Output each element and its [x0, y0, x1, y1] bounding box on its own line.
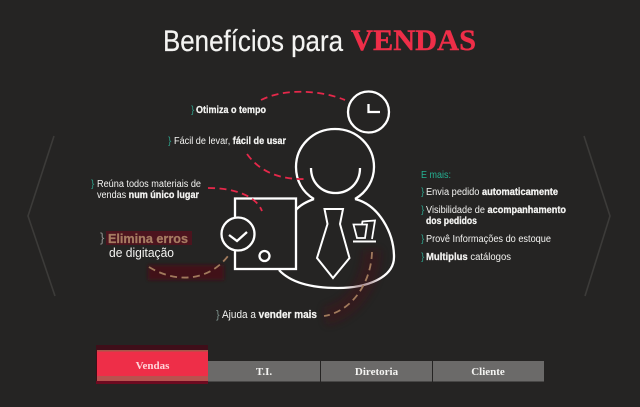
- title: VENDAS: [351, 24, 476, 57]
- tab: Diretoria: [321, 361, 432, 382]
- item: multiple catalogues: }: [421, 252, 425, 263]
- label: easy to carry: }: [168, 136, 172, 147]
- tab: T.I.: [208, 361, 320, 382]
- icon: clock: [348, 92, 389, 132]
- dashed connector: easy to use: [247, 154, 307, 179]
- label: all materials: vendas num único lugar: [97, 190, 199, 201]
- tab: Vendas (active): [96, 345, 208, 384]
- panel: more benefits: [421, 169, 566, 263]
- heading: and more: E mais:: [421, 169, 451, 181]
- item: order tracking: Visibilidade de acompanhamento: [426, 205, 566, 216]
- item: stock information: Provê Informações do estoque: [426, 234, 551, 245]
- arrow: previous: [28, 136, 55, 296]
- dashed connector: single place: [208, 188, 262, 211]
- item: automatic orders: Envia pedido automaticamente: [426, 187, 558, 198]
- tab: Diretoria: Diretoria: [355, 366, 399, 378]
- callout: eliminate errors: de digitação: [109, 245, 174, 260]
- title: [163, 24, 476, 58]
- icon: check circle: [222, 218, 254, 250]
- item: order tracking: }: [421, 205, 425, 216]
- tab: Cliente: [433, 361, 544, 382]
- navigation tabs: [96, 345, 544, 384]
- glow: error highlight: [148, 265, 224, 280]
- dashed connector: sell more: [324, 252, 372, 316]
- tab: Cliente: Cliente: [471, 366, 505, 378]
- item: order tracking: dos pedidos: [426, 216, 477, 227]
- item: stock information: }: [421, 234, 425, 245]
- body: [279, 199, 394, 288]
- label: easy to carry: Fácil de levar, fácil de usar: [174, 136, 286, 147]
- callout: eliminate errors: [100, 230, 192, 260]
- item: automatic orders: }: [421, 187, 425, 198]
- item: order tracking: [421, 205, 566, 227]
- label: save time: }: [191, 105, 195, 116]
- label: all materials: }: [91, 179, 95, 190]
- callout: eliminate errors: Elimina erros: [108, 231, 188, 246]
- label: all materials: [91, 179, 201, 201]
- icon: coffee cups: [353, 220, 376, 242]
- icon: tablet: [235, 198, 296, 269]
- item: multiple catalogues: Multiplus catálogos: [426, 252, 511, 263]
- necktie: [317, 209, 350, 278]
- dashed connector: errors: [149, 256, 228, 278]
- tab: Vendas (active): Vendas: [136, 360, 170, 372]
- label: all materials: Reúna todos materiais de: [97, 179, 201, 190]
- icon: salesperson figure: [279, 129, 394, 288]
- arrow: next: [584, 136, 610, 296]
- label: helps sell more: }: [216, 309, 220, 321]
- callout: eliminate errors: }: [100, 230, 105, 245]
- title: Benefícios para: [163, 25, 343, 58]
- tab: T.I.: T.I.: [256, 366, 272, 378]
- smile: [311, 168, 360, 193]
- label: save time: Otimiza o tempo: [196, 105, 266, 116]
- head: [296, 129, 374, 199]
- glow: sell more connector: [325, 250, 372, 316]
- label: helps sell more: Ajuda a vender mais: [222, 309, 317, 321]
- dashed connector: clock: [261, 92, 345, 100]
